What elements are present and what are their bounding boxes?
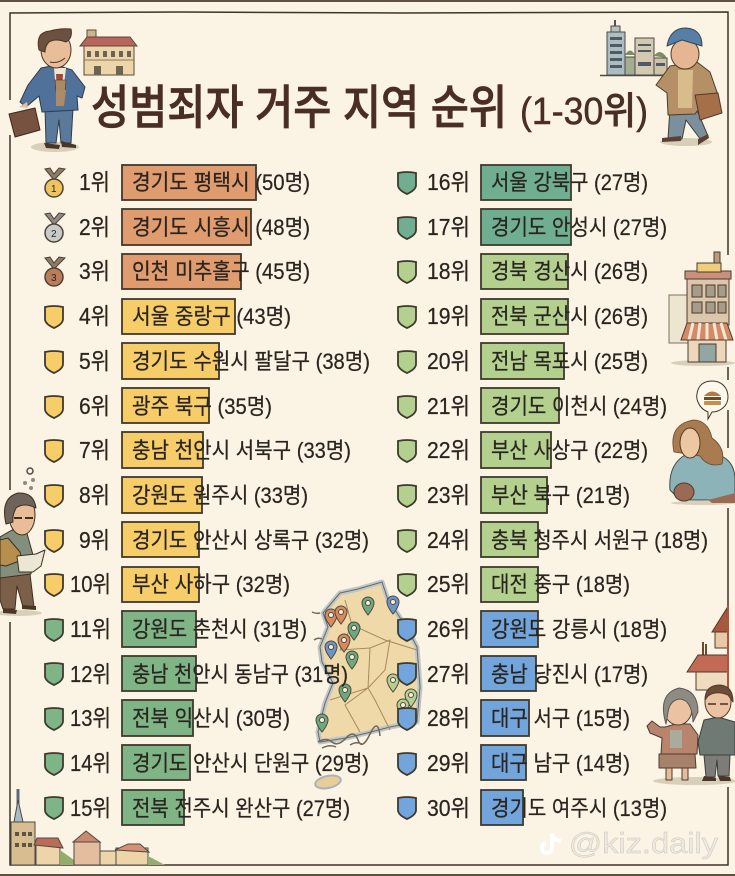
row 3 [45, 254, 310, 289]
bar [122, 611, 196, 647]
place: 경기도 안성시 (27명) [491, 215, 667, 240]
badge [398, 396, 416, 418]
medal: silver [45, 213, 65, 242]
rank: 7위 [79, 437, 110, 463]
place: 서울 강북구 (27명) [491, 170, 648, 195]
place: 충남 당진시 (17명) [491, 662, 648, 687]
badge [45, 530, 63, 552]
place: 충북 청주시 서원구 (18명) [491, 528, 708, 553]
row 23 [398, 477, 630, 513]
badge [45, 306, 63, 328]
row 9 [45, 522, 369, 557]
place: 강원도 춘천시 (31명) [132, 617, 307, 642]
bar [481, 522, 538, 557]
illustration: worried man with glasses [0, 468, 45, 616]
bar [481, 254, 568, 289]
badge [398, 306, 416, 328]
badge [398, 530, 416, 552]
bar [122, 165, 256, 200]
rank: 20위 [427, 348, 470, 374]
rank: 28위 [427, 705, 470, 731]
row 14 [45, 745, 369, 780]
bar [122, 790, 184, 825]
row 27 [398, 656, 648, 691]
row 8 [45, 477, 308, 513]
rank: 18위 [427, 258, 470, 284]
rank: 6위 [79, 393, 110, 419]
row 17 [398, 209, 667, 245]
place: 대전 중구 (18명) [491, 572, 630, 597]
row 1 [45, 165, 310, 200]
bar [481, 477, 547, 513]
rank: 10위 [70, 571, 111, 597]
badge [398, 619, 416, 641]
bar [122, 299, 235, 334]
illustration: town at bottom left [11, 789, 165, 865]
rank: 14위 [70, 750, 111, 776]
bar [481, 209, 571, 245]
rank: 8위 [79, 482, 110, 508]
place: 인천 미추홀구 (45명) [132, 259, 310, 284]
row 5 [45, 343, 370, 379]
row 12 [45, 656, 348, 691]
badge [398, 574, 416, 596]
row 30 [398, 790, 667, 825]
bar [122, 343, 219, 379]
map pins [316, 596, 417, 732]
illustration: thought bubble with burger [697, 381, 728, 419]
rank: 21위 [427, 393, 470, 419]
place: 경기도 시흥시 (48명) [132, 215, 310, 240]
title: 성범죄자 거주 지역 순위 [91, 81, 507, 134]
badge [45, 396, 63, 418]
bar [122, 656, 196, 691]
badge [398, 797, 416, 819]
rank: 13위 [70, 705, 111, 731]
illustration: house at right [687, 606, 728, 690]
rank: 5위 [79, 348, 110, 374]
badge [398, 440, 416, 462]
bar [122, 254, 241, 289]
row 20 [398, 343, 648, 379]
rank: 9위 [79, 527, 110, 553]
place: 경기도 여주시 (13명) [491, 796, 667, 821]
row 29 [398, 745, 630, 780]
rank: 1위 [79, 169, 110, 195]
rank: 12위 [70, 661, 111, 687]
row 13 [45, 700, 290, 736]
bar [481, 165, 571, 200]
place: 부산 사상구 (22명) [491, 438, 648, 463]
badge [45, 351, 63, 373]
illustration: map of South Korea [312, 582, 420, 791]
bar [122, 700, 193, 736]
rank: 30위 [427, 795, 470, 821]
badge [398, 172, 416, 194]
medal: gold: 1 [51, 184, 57, 195]
badge [45, 619, 63, 641]
place: 충남 천안시 동남구 (31명) [132, 662, 348, 687]
bar [122, 745, 190, 780]
place: 부산 북구 (21명) [491, 483, 630, 508]
place: 경기도 이천시 (24명) [491, 394, 667, 419]
row 25 [398, 567, 630, 602]
row 19 [398, 299, 648, 334]
badge [398, 217, 416, 239]
rank: 17위 [427, 214, 470, 240]
medal: gold [45, 168, 65, 197]
place: 경기도 안산시 상록구 (32명) [132, 528, 369, 553]
place: 전북 익산시 (30명) [132, 706, 290, 731]
row 24 [398, 522, 708, 557]
row 26 [398, 611, 667, 647]
medal: bronze: 3 [51, 273, 57, 284]
badge [45, 440, 63, 462]
rank: 24위 [427, 527, 470, 553]
illustration: sitting woman [670, 420, 735, 505]
bar [122, 567, 199, 602]
badge [45, 663, 63, 685]
bar [481, 700, 529, 736]
badge [398, 753, 416, 775]
row 22 [398, 432, 648, 468]
bar [481, 432, 551, 468]
rank: 19위 [427, 303, 470, 329]
illustration: city skyline [600, 20, 668, 76]
rank: 22위 [427, 437, 470, 463]
row 16 [398, 165, 648, 200]
place: 강원도 원주시 (33명) [132, 483, 308, 508]
place: 전북 군산시 (26명) [491, 304, 648, 329]
rank: 4위 [79, 303, 110, 329]
badge [45, 753, 63, 775]
medal: silver: 2 [51, 229, 57, 240]
rank: 11위 [70, 616, 111, 642]
illustration: businessman with briefcase [9, 29, 85, 152]
row 21 [398, 388, 667, 423]
badge [398, 485, 416, 507]
row 4 [45, 299, 291, 334]
bar [481, 343, 564, 379]
place: 경기도 평택시 (50명) [132, 170, 310, 195]
place: 경기도 수원시 팔달구 (38명) [132, 349, 370, 374]
place: 광주 북구 (35명) [132, 394, 272, 419]
title: (1-30위) [520, 91, 648, 133]
place: 서울 중랑구 (43명) [132, 304, 291, 329]
place: 대구 서구 (15명) [491, 706, 630, 731]
rank: 2위 [79, 214, 110, 240]
rank: 15위 [70, 795, 111, 821]
rank: 29위 [427, 750, 470, 776]
illustration: elderly couple [647, 685, 735, 785]
row 6 [45, 388, 272, 423]
illustration: shop building [669, 252, 735, 366]
place: 경북 경산시 (26명) [491, 259, 648, 284]
bar [122, 432, 203, 468]
bar [122, 388, 209, 423]
rank: 25위 [427, 571, 470, 597]
bar [122, 209, 251, 245]
row 15 [45, 790, 350, 825]
row 11 [45, 611, 307, 647]
bar [122, 477, 202, 513]
badge [398, 708, 416, 730]
bar [481, 611, 538, 647]
medal: bronze [45, 257, 65, 286]
bar [481, 299, 568, 334]
illustration: worker with cap and bag [656, 28, 722, 146]
illustration: brick building [80, 30, 137, 75]
rank: 26위 [427, 616, 470, 642]
row 7 [45, 432, 351, 468]
place: 충남 천안시 서북구 (33명) [132, 438, 351, 463]
bar [481, 745, 526, 780]
rank: 23위 [427, 482, 470, 508]
badge [45, 485, 63, 507]
place: 전남 목포시 (25명) [491, 349, 648, 374]
bar [122, 522, 199, 557]
badge [398, 351, 416, 373]
rank: 16위 [427, 169, 470, 195]
row 10 [45, 567, 290, 602]
bar [481, 388, 559, 423]
rank: 27위 [427, 661, 470, 687]
bar [481, 567, 538, 602]
place: 대구 남구 (14명) [491, 751, 630, 776]
badge [398, 261, 416, 283]
row 2 [45, 209, 310, 245]
place: 부산 사하구 (32명) [132, 572, 290, 597]
place: 경기도 안산시 단원구 (29명) [132, 751, 369, 776]
badge [45, 574, 63, 596]
row 28 [398, 700, 630, 736]
rank: 3위 [79, 258, 110, 284]
watermark: @kiz.daily [569, 828, 719, 860]
badge [398, 663, 416, 685]
place: 강원도 강릉시 (18명) [491, 617, 667, 642]
badge [45, 797, 63, 819]
row 18 [398, 254, 648, 289]
place: 전북 전주시 완산구 (27명) [132, 796, 350, 821]
bar [481, 656, 536, 691]
bar [481, 790, 523, 825]
badge [45, 708, 63, 730]
